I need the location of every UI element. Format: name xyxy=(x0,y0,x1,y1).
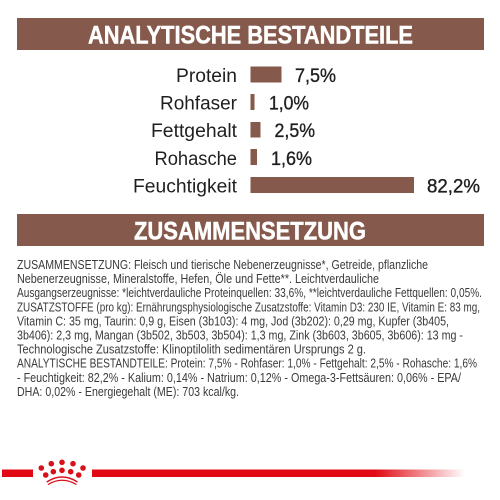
row: protein: Protein xyxy=(176,66,237,87)
row: feuchtigkeit xyxy=(133,176,480,198)
text block: composition details: DHA: 0,02% - Energiegehalt (ME): 703 kcal/kg. xyxy=(17,385,239,399)
heading: analytische bestandteile xyxy=(17,18,484,50)
row: rohasche: 1,6% xyxy=(271,149,312,170)
row: rohfaser: Rohfaser xyxy=(160,94,238,114)
bar chart: analytical constituents xyxy=(133,66,480,198)
row: rohfaser: 1,0% xyxy=(269,94,309,114)
row: fettgehalt: Fettgehalt xyxy=(151,121,238,142)
heading: zusammensetzung: ZUSAMMENSETZUNG xyxy=(134,218,366,246)
row: rohfaser xyxy=(160,94,309,114)
row: feuchtigkeit: Feuchtigkeit xyxy=(133,176,238,198)
row: protein: 7,5% xyxy=(295,66,336,87)
text block: composition details xyxy=(17,258,482,399)
text block: composition details: Nebenerzeugnisse, Mineralstoffe, Hefen, Öle und Fette**. Leichtverdauliche xyxy=(17,272,379,286)
row: rohasche xyxy=(154,149,312,170)
row: feuchtigkeit: 82,2% xyxy=(427,176,480,198)
row: rohasche: Rohasche xyxy=(154,149,237,170)
text block: composition details: Technologische Zusatzstoffe: Klinoptilolith sedimentären Ursprungs 2 g. xyxy=(17,343,366,357)
red footer line: left segment xyxy=(2,470,33,477)
row: protein xyxy=(176,66,336,87)
icon: royal canin crown logo xyxy=(38,460,86,484)
row: fettgehalt: 2,5% xyxy=(274,121,315,142)
heading: analytische bestandteile: ANALYTISCHE BESTANDTEILE xyxy=(88,22,413,50)
heading: zusammensetzung xyxy=(17,214,484,246)
red footer line: right segment fading out xyxy=(92,470,465,477)
row: fettgehalt xyxy=(151,121,315,142)
text block: composition details: ZUSAMMENSETZUNG: Fleisch und tierische Nebenerzeugnisse*, Getreide, pflanzliche xyxy=(17,258,428,272)
